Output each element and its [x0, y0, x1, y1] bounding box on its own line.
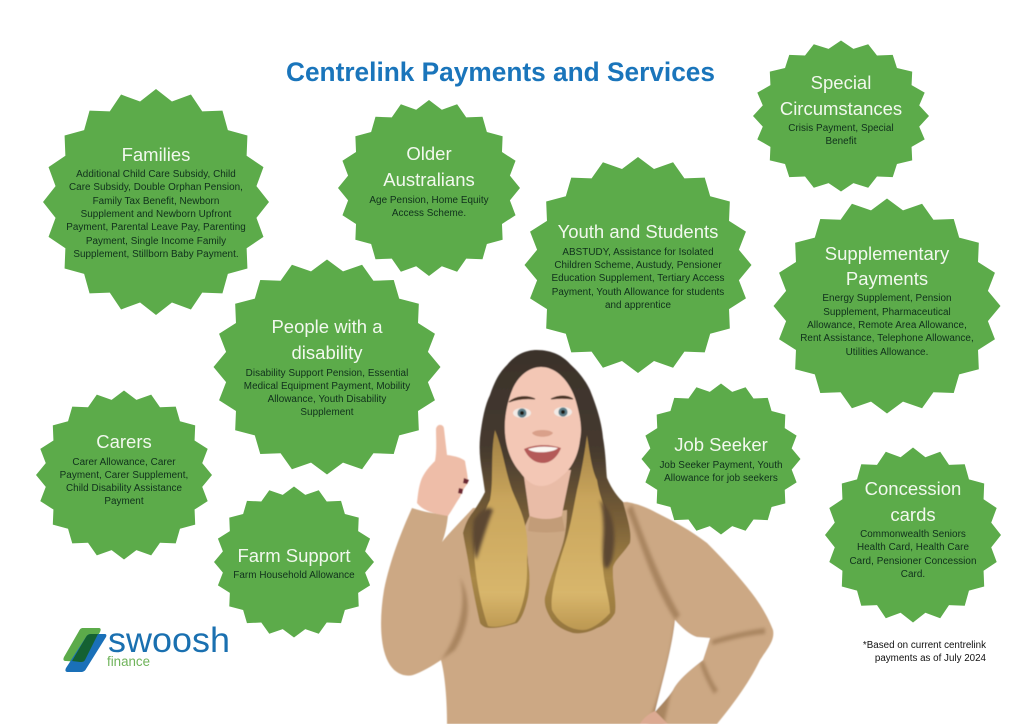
panel: concession cards [825, 448, 1001, 622]
heading: families: Families [122, 144, 190, 165]
text: youth and students payments: Children Scheme, Austudy, Pensioner [554, 260, 722, 271]
text: supplementary payments list: Energy Supplement, Pension [822, 293, 952, 304]
logo: swoosh finance [63, 621, 230, 672]
starburst: carers [36, 390, 212, 560]
starburst: families [43, 89, 269, 315]
text: job seeker payments: Job Seeker Payment, Youth [659, 460, 783, 471]
text: supplementary payments list: Utilities Allowance. [846, 347, 928, 358]
text: families payments: Family Tax Benefit, Newborn [93, 196, 219, 207]
text: carers payments: Carer Allowance, Carer [72, 457, 176, 468]
logo mark [63, 628, 106, 672]
text: families payments: Additional Child Care Subsidy, Child [76, 169, 236, 180]
text: supplementary payments list: Allowance, Remote Area Allowance, [807, 320, 967, 331]
text: youth and students payments: and apprentice [605, 300, 671, 311]
face [505, 367, 581, 486]
text: older australians payments: Access Scheme. [392, 208, 466, 219]
panel: older australians [338, 100, 520, 276]
footnote: *Based on current centrelink [863, 640, 986, 651]
text: youth and students payments: Education Supplement, Tertiary Access [552, 273, 724, 284]
logo wordmark: swoosh [108, 621, 230, 660]
text: concession cards list: Commonwealth Seniors [860, 529, 966, 540]
heading: farm support: Farm Support [237, 545, 351, 566]
heading: older australians: Australians [383, 169, 475, 190]
panel: families [43, 89, 269, 315]
panel: special circumstances [753, 40, 929, 192]
text: carers payments: Payment [104, 496, 144, 507]
teeth [528, 447, 558, 452]
text: special circumstances payments: Crisis Payment, Special [788, 123, 894, 134]
heading: supplementary payments: Supplementary [825, 243, 950, 264]
text: job seeker payments: Allowance for job seekers [664, 473, 778, 484]
logo tagline: finance [107, 654, 150, 669]
starburst: youth and students [524, 157, 752, 373]
text: families payments: Supplement, Stillborn Baby Payment. [73, 249, 239, 260]
panel: people with a disability [214, 260, 440, 474]
starburst: people with a disability [214, 260, 440, 474]
text: concession cards list: Health Card, Health Care [857, 542, 969, 553]
footnote: payments as of July 2024 [875, 653, 987, 664]
text: carers payments: Child Disability Assistance [66, 483, 182, 494]
text: supplementary payments list: Rent Assistance, Telephone Allowance, [800, 333, 974, 344]
heading: special circumstances: Circumstances [780, 98, 902, 119]
starburst: job seeker [642, 384, 800, 534]
starburst: older australians [338, 100, 520, 276]
pointing hand [417, 425, 468, 516]
text: disability payments: Allowance, Youth Disability [268, 394, 386, 405]
hair back [463, 350, 631, 633]
text: families payments: Payment, Single Income Family [86, 236, 226, 247]
panel: carers [36, 390, 212, 560]
gap between arm and body [655, 620, 710, 712]
heading: people with a disability: disability [292, 342, 363, 363]
heading: special circumstances: Special [811, 72, 871, 93]
eyebrows [509, 396, 573, 402]
text: farm support payments: Farm Household Allowance [233, 570, 355, 581]
text: disability payments: Disability Support Pension, Essential [246, 368, 408, 379]
text: concession cards list: Card, Pensioner Concession [850, 556, 976, 567]
text: families payments: Payment, Parental Leave Pay, Parenting [66, 222, 246, 233]
hand on hip [640, 711, 668, 724]
heading: youth and students: Youth and Students [558, 221, 718, 242]
starburst: concession cards [825, 448, 1001, 622]
text: concession cards list: Card. [901, 569, 925, 580]
starburst: supplementary payments [774, 198, 1000, 414]
heading: concession cards: cards [890, 504, 936, 525]
text: older australians payments: Age Pension, Home Equity [369, 195, 489, 206]
panel: supplementary payments [774, 198, 1000, 414]
eyes [513, 407, 572, 418]
panel: job seeker [642, 384, 800, 534]
panel: farm support [214, 486, 374, 638]
text: disability payments: Medical Equipment Payment, Mobility [244, 381, 410, 392]
blonde lock right [552, 435, 610, 630]
mouth [524, 445, 561, 463]
starburst: special circumstances [753, 40, 929, 192]
nose [532, 430, 553, 437]
heading: carers: Carers [96, 431, 152, 452]
sweater shading [441, 505, 765, 724]
text: youth and students payments: ABSTUDY, Assistance for Isolated [562, 247, 714, 258]
text: disability payments: Supplement [300, 407, 354, 418]
text: special circumstances payments: Benefit [825, 136, 857, 147]
heading: job seeker: Job Seeker [674, 434, 768, 455]
finger nails [458, 478, 469, 494]
heading: concession cards: Concession [865, 478, 961, 499]
text: youth and students payments: Payment, Youth Allowance for students [552, 287, 724, 298]
text: carers payments: Payment, Carer Supplement, [60, 470, 188, 481]
sweater [381, 502, 773, 724]
heading: people with a disability: People with a [271, 316, 383, 337]
neck [523, 470, 571, 521]
title: Centrelink Payments and Services [286, 57, 715, 87]
hair dark strand [473, 500, 614, 568]
blonde lock left [474, 430, 528, 627]
starburst: farm support [214, 486, 374, 638]
sweater collar [528, 516, 565, 532]
illustration: smiling woman pointing up [381, 350, 773, 724]
heading: older australians: Older [406, 143, 452, 164]
text: families payments: Care Subsidy, Double Orphan Pension, [69, 182, 243, 193]
text: supplementary payments list: Supplement, Pharmaceutical [823, 307, 951, 318]
heading: supplementary payments: Payments [846, 268, 928, 289]
panel: youth and students [524, 157, 752, 373]
text: families payments: Supplement and Newborn Upfront [81, 209, 232, 220]
